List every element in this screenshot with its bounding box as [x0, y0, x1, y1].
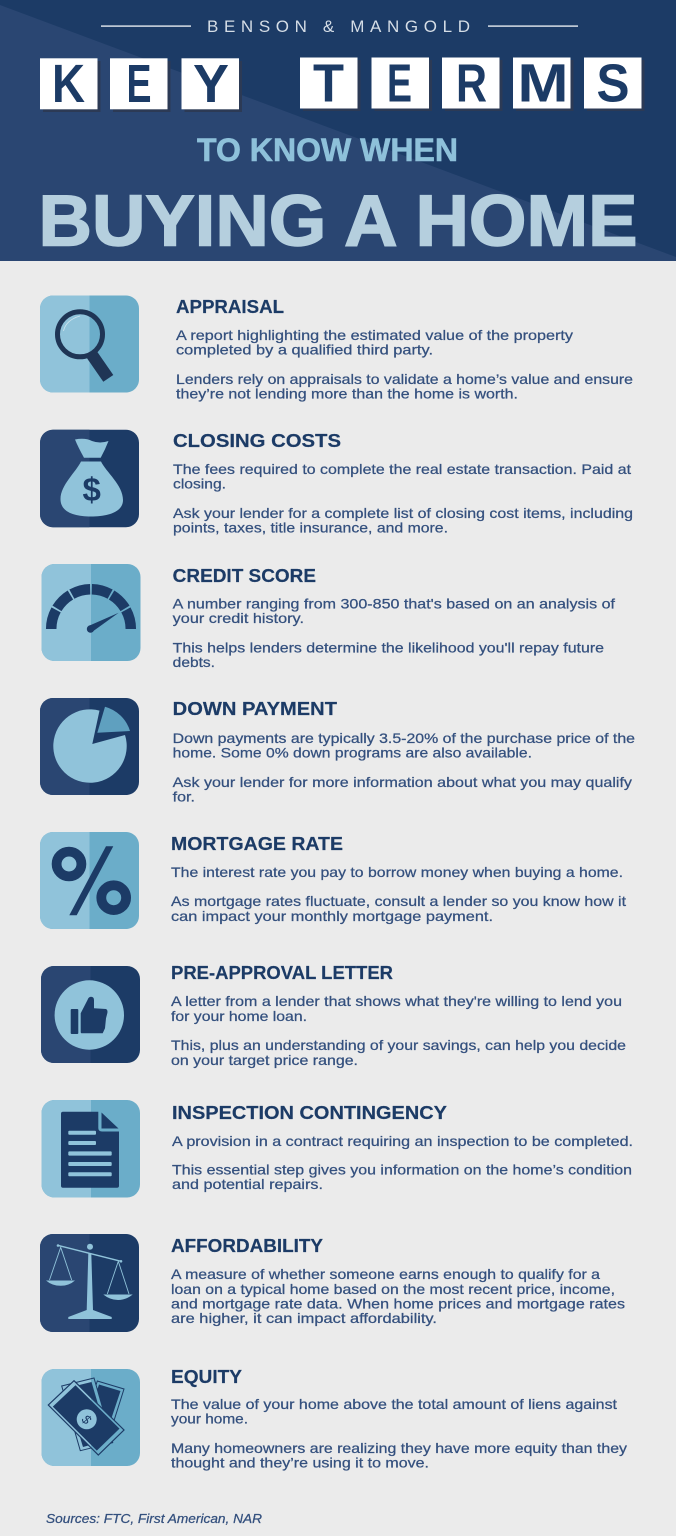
- body: equity: The value of your home above the total amount of liens against: [171, 1396, 617, 1412]
- body: credit score: your credit history.: [173, 610, 304, 626]
- body: affordability: A measure of whether someone earns enough to qualify for a: [171, 1266, 600, 1282]
- panel: affordability: [40, 1234, 625, 1332]
- icon: document: [42, 1100, 140, 1198]
- body: closing costs: closing.: [173, 476, 226, 492]
- body: appraisal: [176, 327, 633, 402]
- body: pre-approval letter: A letter from a lender that shows what they're willing to lend you: [171, 993, 622, 1009]
- icon: thumbs up: [41, 966, 140, 1063]
- body: credit score: [173, 596, 615, 670]
- title: key terms letter tiles: E: [126, 54, 152, 114]
- body: equity: Many homeowners are realizing they have more equity than they: [171, 1440, 627, 1456]
- body: equity: [171, 1396, 627, 1470]
- heading: pre-approval letter: PRE-APPROVAL LETTER: [171, 962, 393, 983]
- main title: BUYING A HOME: [38, 182, 638, 262]
- brand line: BENSON & MANGOLD: [207, 17, 470, 36]
- icon: percent sign: [40, 832, 139, 929]
- title: key terms letter tiles: [40, 54, 644, 114]
- body: credit score: This helps lenders determine the likelihood you'll repay future: [173, 640, 604, 656]
- body: pre-approval letter: for your home loan.: [171, 1008, 307, 1024]
- title: key terms letter tiles: E: [387, 54, 412, 114]
- body: mortgage rate: As mortgage rates fluctuate, consult a lender so you know how it: [171, 893, 626, 909]
- title: key terms letter tiles: S: [596, 54, 630, 114]
- body: closing costs: Ask your lender for a complete list of closing cost items, including: [173, 505, 633, 521]
- body: appraisal: Lenders rely on appraisals to validate a home’s value and ensure: [176, 371, 633, 387]
- icon: balance scale: [40, 1234, 139, 1332]
- body: equity: thought and they’re using it to move.: [171, 1454, 429, 1470]
- header banner: [0, 0, 676, 262]
- body: affordability: loan on a typical home based on the most recent price, income,: [171, 1281, 615, 1297]
- body: affordability: and mortgage rate data. When home prices and mortgage rates: [171, 1296, 625, 1312]
- body: pre-approval letter: This, plus an understanding of your savings, can help you decide: [171, 1037, 626, 1053]
- title: key terms letter tiles: T: [313, 54, 344, 114]
- title: key terms letter tiles: M: [518, 54, 568, 114]
- panel: appraisal: [40, 296, 633, 402]
- body: inspection contingency: [172, 1133, 633, 1192]
- body: appraisal: completed by a qualified third party.: [176, 342, 433, 358]
- title: key terms letter tiles: Y: [193, 54, 229, 114]
- heading: affordability: AFFORDABILITY: [171, 1235, 324, 1256]
- heading: equity: EQUITY: [171, 1366, 243, 1387]
- body: down payment: Ask your lender for more information about what you may qualify: [173, 774, 632, 790]
- body: down payment: for.: [173, 788, 195, 804]
- heading: down payment: DOWN PAYMENT: [173, 698, 338, 719]
- body: credit score: A number ranging from 300-850 that's based on an analysis of: [173, 596, 615, 612]
- title: key terms letter tiles: R: [456, 54, 487, 114]
- icon: money bag: $: [83, 471, 101, 508]
- body: closing costs: [173, 461, 633, 536]
- panel: inspection contingency: [42, 1100, 633, 1198]
- icon: magnifying glass: [40, 296, 139, 392]
- icon: money bills: [42, 1369, 140, 1466]
- body: affordability: are higher, it can impact affordability.: [171, 1310, 437, 1326]
- panel: mortgage rate: [40, 832, 626, 929]
- heading: mortgage rate: MORTGAGE RATE: [171, 833, 343, 854]
- icon: money bag: [40, 430, 139, 527]
- panel: pre-approval letter: [41, 962, 626, 1068]
- panel: equity: [42, 1366, 627, 1470]
- body: pre-approval letter: [171, 993, 626, 1068]
- body: credit score: debts.: [173, 654, 215, 670]
- panel: down payment: [40, 698, 635, 804]
- heading: closing costs: CLOSING COSTS: [173, 430, 341, 451]
- icon: pie chart: [40, 698, 139, 795]
- body: affordability: [171, 1266, 625, 1326]
- body: inspection contingency: A provision in a contract requiring an inspection to be completed.: [172, 1133, 633, 1149]
- icon: gauge: [42, 564, 140, 669]
- body: mortgage rate: The interest rate you pay to borrow money when buying a home.: [171, 864, 623, 880]
- body: mortgage rate: can impact your monthly mortgage payment.: [171, 908, 493, 924]
- subtitle: TO KNOW WHEN: [197, 132, 458, 168]
- body: appraisal: A report highlighting the estimated value of the property: [176, 327, 573, 343]
- body: appraisal: they’re not lending more than the home is worth.: [176, 386, 518, 402]
- sources: Sources: FTC, First American, NAR: [46, 1511, 262, 1526]
- body: down payment: [173, 730, 635, 804]
- body: mortgage rate: [171, 864, 626, 924]
- body: down payment: Down payments are typically 3.5-20% of the purchase price of the: [173, 730, 635, 746]
- body: pre-approval letter: on your target price range.: [171, 1052, 358, 1068]
- body: equity: your home.: [171, 1410, 248, 1426]
- heading: inspection contingency: INSPECTION CONTINGENCY: [172, 1102, 448, 1123]
- panel: credit score: [42, 564, 615, 670]
- heading: appraisal: APPRAISAL: [176, 296, 284, 317]
- title: key terms letter tiles: K: [52, 54, 85, 114]
- icon: money bills: $: [78, 1411, 95, 1428]
- panel: closing costs: [40, 430, 633, 536]
- body: inspection contingency: This essential step gives you information on the home’s condition: [172, 1162, 632, 1178]
- body: inspection contingency: and potential repairs.: [172, 1176, 323, 1192]
- body: down payment: home. Some 0% down programs are also available.: [173, 744, 532, 760]
- body: closing costs: The fees required to complete the real estate transaction. Paid at: [173, 461, 631, 477]
- heading: credit score: CREDIT SCORE: [173, 565, 316, 586]
- body: closing costs: points, taxes, title insurance, and more.: [173, 520, 448, 536]
